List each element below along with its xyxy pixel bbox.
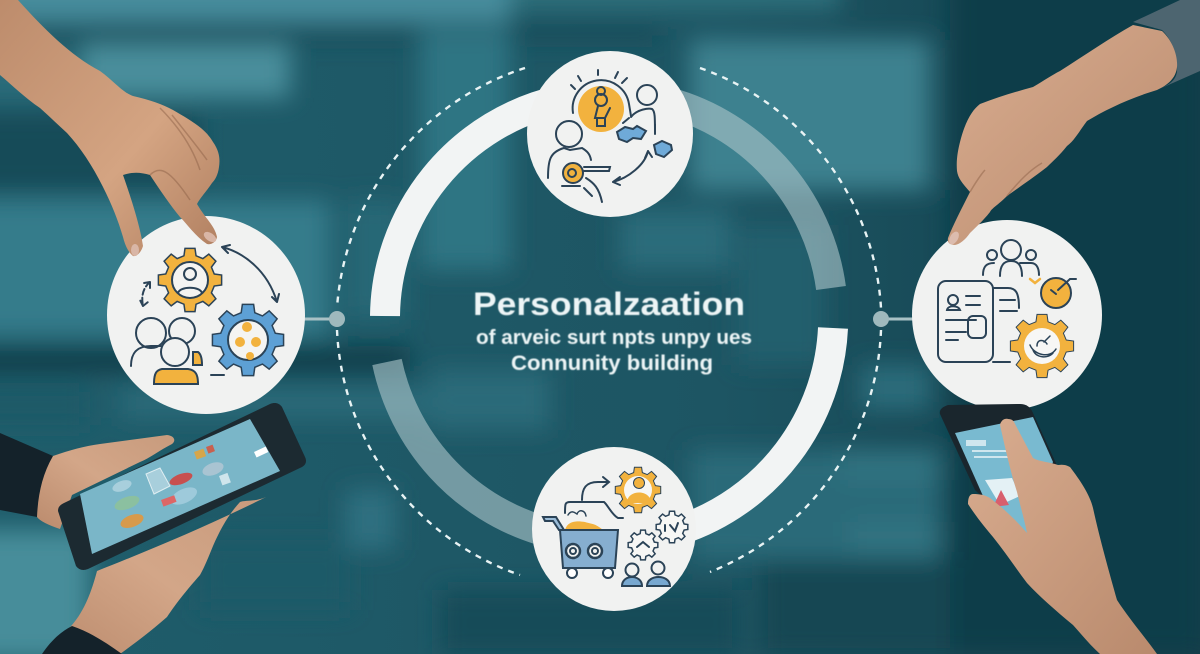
dashed orbit ring	[337, 68, 881, 575]
central heading	[473, 286, 752, 375]
hand: lower left under phone	[45, 497, 266, 654]
app icons	[111, 445, 268, 531]
phone: left	[58, 403, 306, 570]
main process ring	[385, 100, 833, 530]
connector left	[304, 311, 345, 327]
title: Personalzaation	[473, 286, 745, 322]
fingernails	[131, 230, 218, 256]
sleeve: lower left	[0, 433, 53, 517]
sleeve: bottom left	[42, 626, 122, 654]
phone screen	[80, 419, 280, 554]
hand: lower left thumb	[37, 435, 174, 529]
hand: top left pointing	[0, 0, 219, 256]
node: top	[527, 51, 693, 217]
icon: profile cards, people, gear	[938, 240, 1076, 378]
connector right	[873, 311, 913, 327]
icon: shopping cart with gears	[543, 467, 688, 586]
node: bottom	[532, 447, 696, 611]
fingernail	[947, 230, 961, 246]
phone screen with triangle	[955, 417, 1053, 537]
hand: lower right tapping	[968, 419, 1157, 654]
phone: right	[940, 404, 1060, 540]
icon: people with lightbulb	[548, 70, 672, 202]
node: left	[107, 216, 305, 414]
community building line: Connunity building	[511, 351, 713, 375]
subtitle line: of arveic surt npts unpy ues	[476, 326, 752, 349]
node: right	[912, 220, 1102, 410]
sleeve: top right	[1133, 0, 1200, 90]
hand: top right pointing	[947, 25, 1177, 246]
icon: gears and people	[131, 245, 284, 384]
